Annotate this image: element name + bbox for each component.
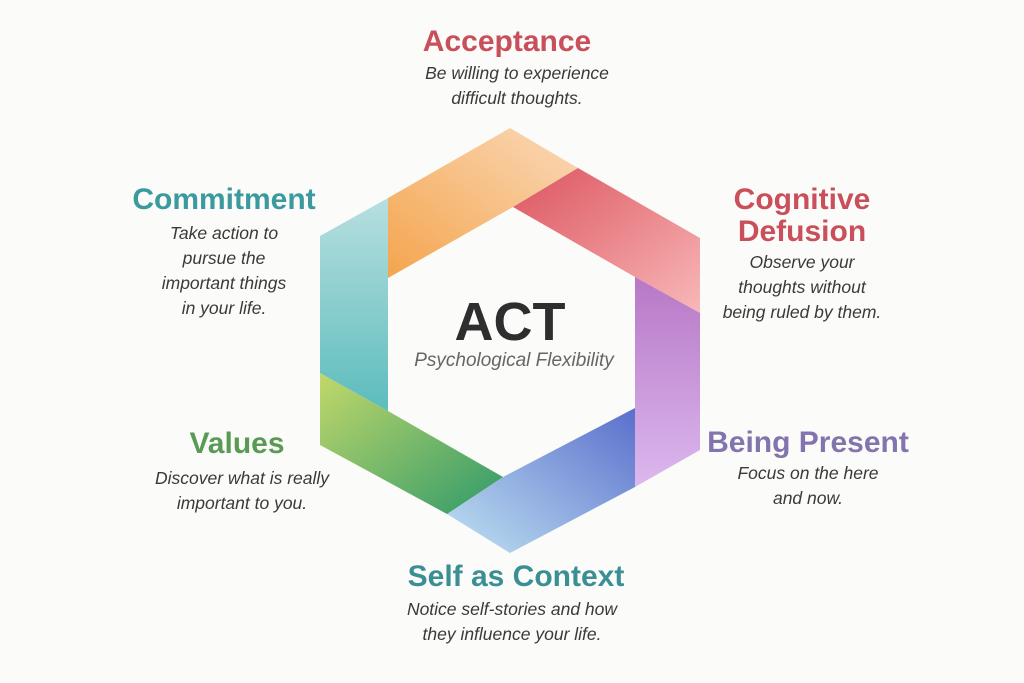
text: being present — [707, 426, 909, 508]
text: values: Discover what is really — [155, 468, 329, 488]
text: self as context: Self as Context — [408, 560, 624, 593]
text: self as context — [407, 560, 624, 644]
text: cognitive defusion: Defusion — [738, 215, 866, 248]
text: values: important to you. — [177, 493, 307, 513]
segment: values green — [320, 373, 503, 514]
text: being present: and now. — [773, 488, 843, 508]
text: commitment: Take action to — [170, 223, 278, 243]
segment: defusion red — [513, 168, 700, 313]
text: cognitive defusion: being ruled by them. — [723, 302, 881, 322]
text: cognitive defusion: Cognitive — [734, 183, 870, 216]
text: values: Values — [189, 427, 285, 460]
segment: present purple — [635, 277, 700, 487]
text: commitment: in your life. — [182, 298, 266, 318]
text: commitment — [132, 183, 316, 318]
text: cognitive defusion: Observe your — [749, 252, 855, 272]
text: cognitive defusion — [723, 183, 881, 322]
segment: self as context blue — [447, 408, 635, 553]
text: values — [155, 427, 330, 513]
segment: acceptance orange — [388, 128, 578, 278]
center subtitle: Psychological Flexibility — [414, 350, 614, 371]
text: self as context: they influence your life. — [422, 624, 602, 644]
center title ACT: ACT — [454, 292, 565, 352]
text: self as context: Notice self-stories and how — [407, 599, 617, 619]
segment: commitment teal — [320, 198, 388, 411]
text: acceptance: difficult thoughts. — [451, 88, 583, 108]
text: cognitive defusion: thoughts without — [738, 277, 866, 297]
text: acceptance: Acceptance — [423, 25, 591, 58]
text: being present: Focus on the here — [737, 463, 879, 483]
text: acceptance — [423, 25, 609, 108]
text: acceptance: Be willing to experience — [425, 63, 609, 83]
text: being present: Being Present — [707, 426, 909, 459]
text: commitment: pursue the — [183, 248, 265, 268]
text: commitment: important things — [162, 273, 286, 293]
text: commitment: Commitment — [132, 183, 316, 216]
